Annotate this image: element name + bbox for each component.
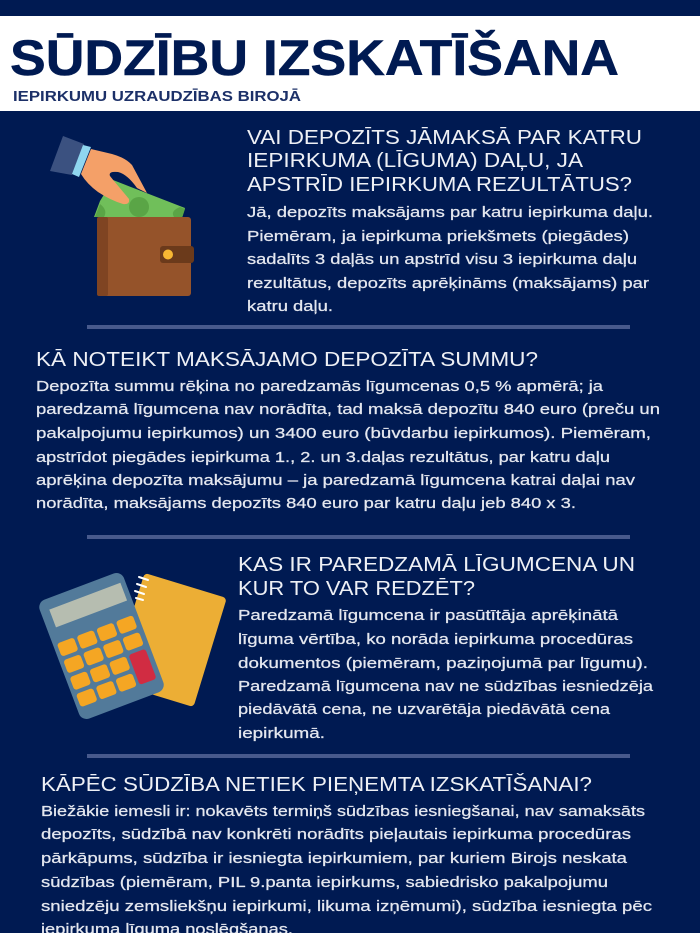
heading: KĀPĒC SŪDZĪBA NETIEK PIEŅEMTA IZSKATĪŠANAI? xyxy=(41,773,592,796)
text block: depozīts, sūdzībā nav konkrēti norādīts pieļautais iepirkuma procedūras xyxy=(41,827,631,843)
heading: APSTRĪD IEPIRKUMA REZULTĀTUS? xyxy=(247,173,632,196)
heading: KUR TO VAR REDZĒT? xyxy=(238,577,475,600)
text block: Piemēram, ja iepirkuma priekšmets (piegādes) xyxy=(247,229,629,245)
header band xyxy=(0,16,700,111)
panel: why complaint is rejected xyxy=(41,773,652,933)
text block: pārkāpums, sūdzība ir iesniegta iepirkumiem, par kuriem Birojs neskata xyxy=(41,851,628,867)
text block: iepirkumā. xyxy=(238,726,325,742)
text block: dokumentos (piemēram, paziņojumā par līgumu). xyxy=(238,656,648,672)
heading: KAS IR PAREDZAMĀ LĪGUMCENA UN xyxy=(238,553,635,576)
heading: VAI DEPOZĪTS JĀMAKSĀ PAR KATRU xyxy=(247,126,642,149)
text block: piedāvātā cena, ne uzvarētāja piedāvātā cena xyxy=(238,702,611,718)
heading xyxy=(247,126,642,196)
text block: Biežākie iemesli ir: nokavēts termiņš sūdzības iesniegšanai, nav samaksāts xyxy=(41,804,645,820)
text block: katru daļu. xyxy=(247,299,333,315)
subtitle: IEPIRKUMU UZRAUDZĪBAS BIROJĀ xyxy=(13,88,301,105)
panel: deposit amount xyxy=(36,348,660,512)
heading xyxy=(238,553,635,600)
panel: estimated contract price xyxy=(238,553,654,742)
text block: Depozīta summu rēķina no paredzamās līgumcenas 0,5 % apmērā; ja xyxy=(36,379,604,395)
panel: deposit for each lot xyxy=(247,126,653,315)
text block: rezultātus, depozīts aprēķināms (maksājams) par xyxy=(247,276,649,292)
heading: IEPIRKUMA (LĪGUMA) DAĻU, JA xyxy=(247,149,584,172)
text block xyxy=(247,205,653,315)
text block: sūdzības (piemēram, PIL 9.panta iepirkums, sabiedrisko pakalpojumu xyxy=(41,875,608,891)
text block: pakalpojumu iepirkumos) un 3400 euro (būvdarbu iepirkumos). Piemēram, xyxy=(36,426,651,442)
text block: aprēķina depozīta maksājumu – ja paredzamā līgumcena katrai daļai nav xyxy=(36,473,636,489)
text block: sadalīts 3 daļās un apstrīd visu 3 iepirkuma daļu xyxy=(247,252,637,268)
text block: Paredzamā līgumcena nav ne sūdzības iesniedzēja xyxy=(238,679,654,695)
text block: norādīta, maksājams depozīts 840 euro par katru daļu jeb 840 x 3. xyxy=(36,496,576,512)
text block: sniedzēju zemsliekšņu iepirkumi, likuma izņēmumi), sūdzība iesniegta pēc xyxy=(41,899,652,915)
icon: calculator and notebook xyxy=(37,571,227,721)
icon: hand putting money in wallet xyxy=(50,136,194,296)
text block: Jā, depozīts maksājams par katru iepirkuma daļu. xyxy=(247,205,653,221)
text block xyxy=(41,804,652,933)
heading: KĀ NOTEIKT MAKSĀJAMO DEPOZĪTA SUMMU? xyxy=(36,348,538,371)
text block: apstrīdot piegādes iepirkuma 1., 2. un 3.daļas rezultātus, par katru daļu xyxy=(36,450,610,466)
title: SŪDZĪBU IZSKATĪŠANA xyxy=(10,29,619,86)
text block: paredzamā līgumcena nav norādīta, tad maksā depozītu 840 euro (preču un xyxy=(36,402,660,418)
text block xyxy=(238,608,654,742)
text block: līguma vērtība, ko norāda iepirkuma procedūras xyxy=(238,632,633,648)
text block xyxy=(36,379,660,512)
text block: Paredzamā līgumcena ir pasūtītāja aprēķinātā xyxy=(238,608,619,624)
